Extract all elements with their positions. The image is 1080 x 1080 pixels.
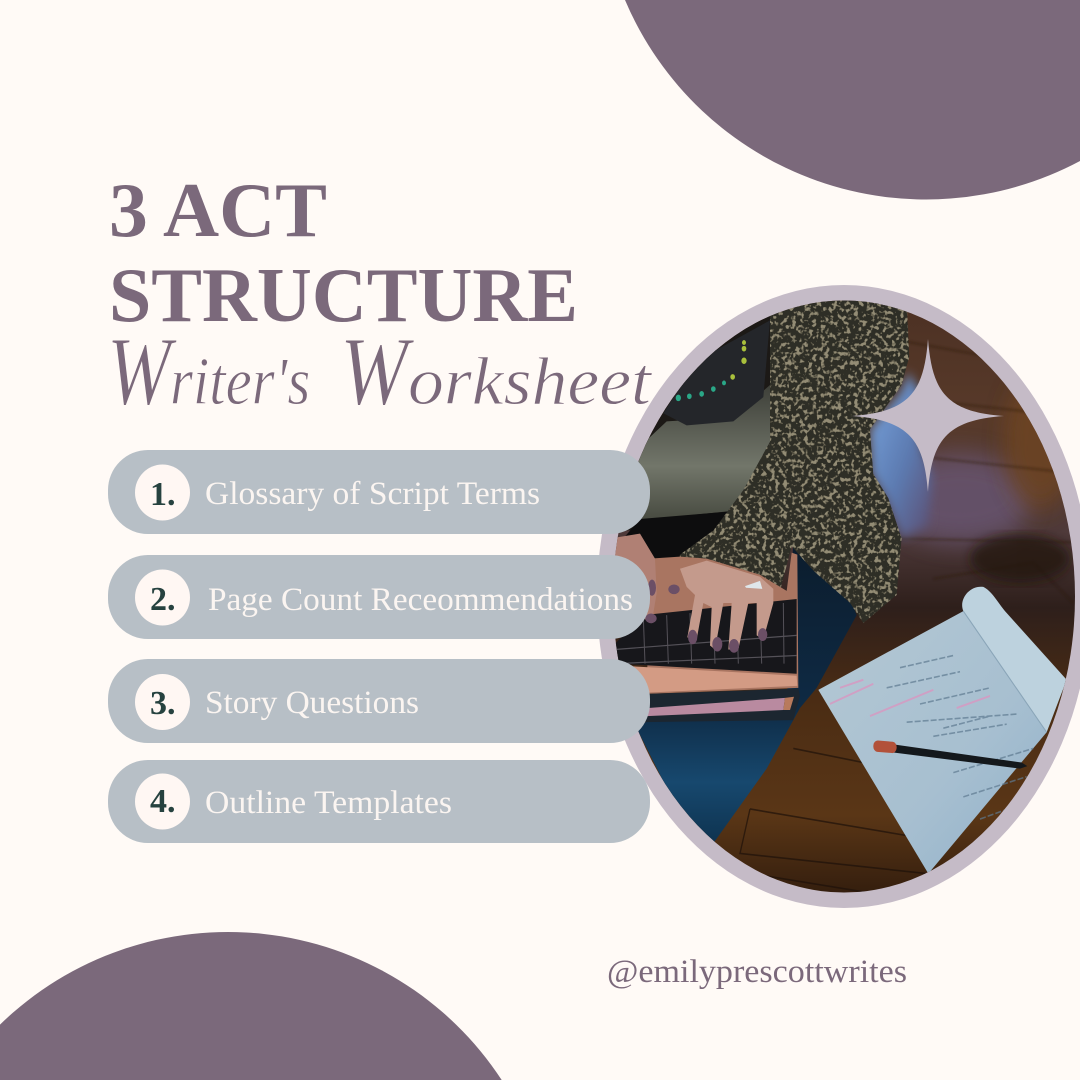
photo: laptop: [613, 553, 800, 722]
subtitle: script: W: [107, 318, 178, 426]
icon: four-point star: [852, 339, 1004, 492]
list item 3: Story Questions: [205, 685, 419, 721]
list item 4: [108, 760, 650, 843]
photo: right hand: [645, 561, 773, 653]
photo: shirt: [638, 385, 770, 519]
subtitle: script: riter's: [170, 343, 325, 419]
photo: left hand: [615, 534, 656, 624]
list item 1: Glossary of Script Terms: [205, 476, 540, 512]
photo: pencil: [873, 740, 1027, 769]
number badge 1: [135, 464, 190, 520]
decorative circle: bottom left: [0, 932, 502, 1080]
title: STRUCTURE: [109, 252, 578, 338]
photo: jeans: [637, 538, 857, 843]
photo background: wood floor: [600, 280, 1080, 910]
number badge 4: [135, 774, 190, 830]
subtitle: script: orksheet: [408, 343, 653, 419]
list item 1: 1.: [150, 476, 176, 513]
title: 3 ACT: [109, 167, 327, 253]
list item 4: 4.: [150, 783, 176, 820]
photo: writer with laptop and script: [600, 280, 1080, 910]
photo: script pages: [818, 587, 1067, 874]
list item 2: 2.: [150, 581, 176, 618]
title: [109, 167, 578, 338]
photo: necklace: [663, 320, 770, 425]
subtitle: script: W: [340, 318, 415, 426]
photo: dark waist: [626, 512, 727, 558]
photo frame: oval ring: [597, 285, 1080, 908]
list item 2: Page Count Receommendations: [208, 582, 633, 618]
photo: sweater: [678, 300, 909, 623]
list item 3: 3.: [150, 685, 176, 722]
list item 1: [108, 450, 650, 534]
list item 3: [108, 659, 650, 743]
list item 2: [108, 555, 650, 639]
number badge 3: [135, 674, 190, 730]
social handle: @emilyprescottwrites: [607, 954, 907, 990]
photo: dark hair area: [626, 315, 772, 530]
decorative circle: top right: [625, 0, 1080, 199]
list item 4: Outline Templates: [205, 785, 452, 821]
number badge 2: [135, 570, 190, 626]
photo: blue floor reflection: [870, 373, 933, 538]
